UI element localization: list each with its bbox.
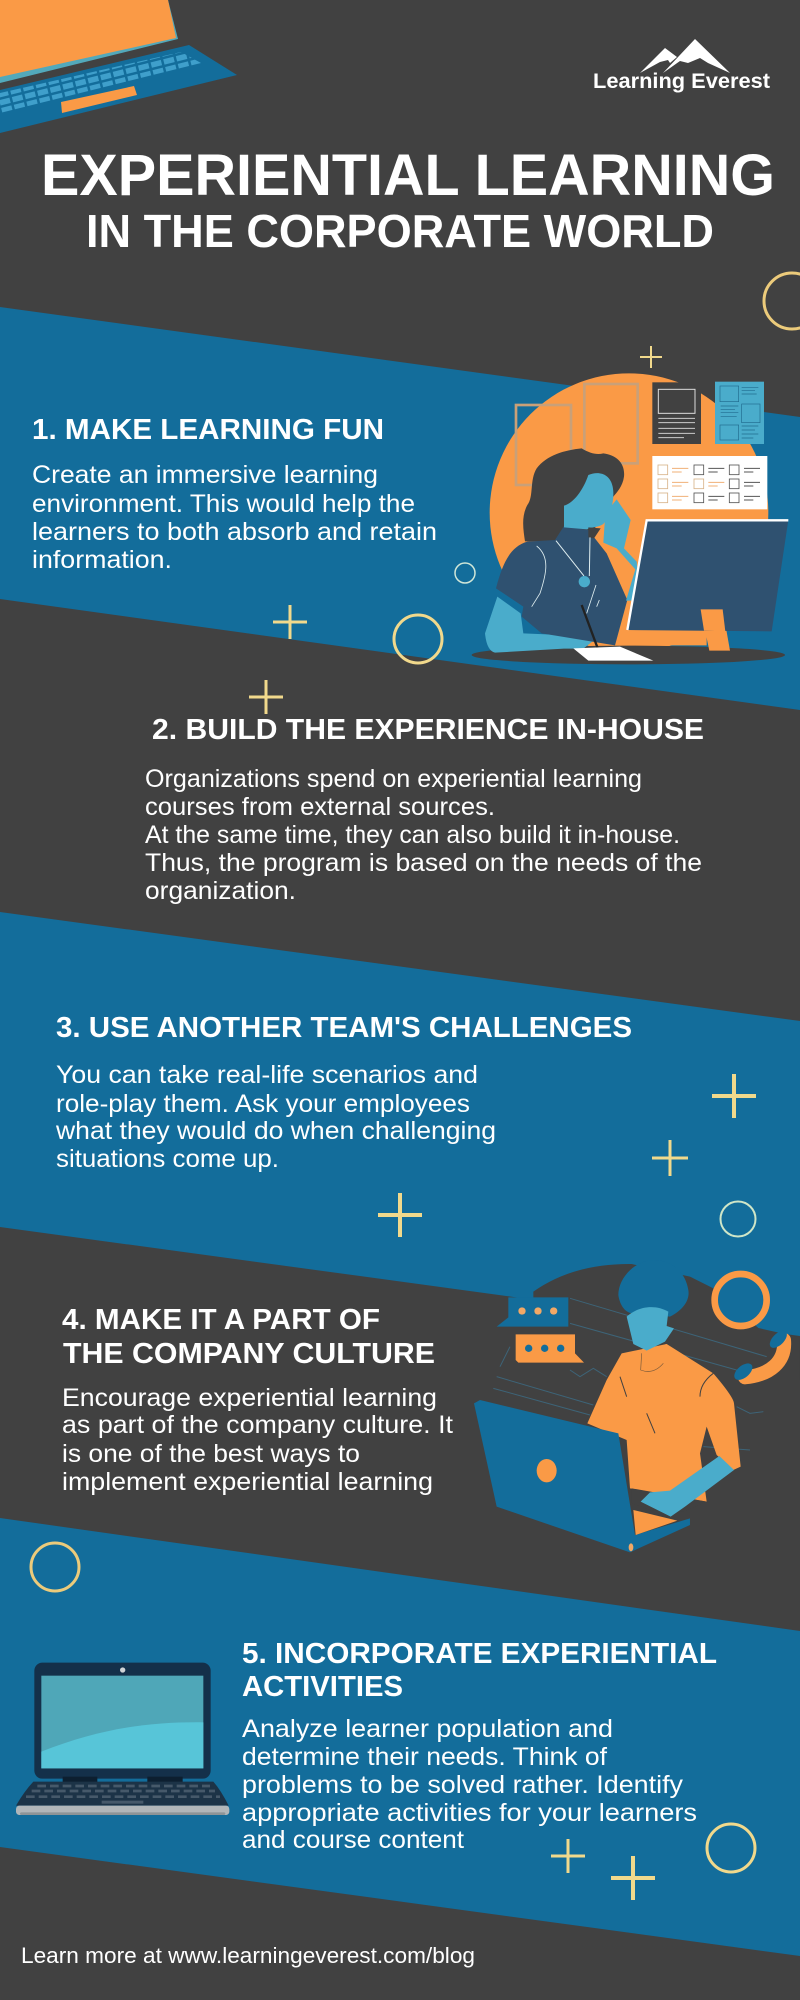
monitor bbox=[627, 520, 788, 651]
heading 4 bbox=[62, 1304, 435, 1370]
title: EXPERIENTIAL LEARNING bbox=[41, 143, 775, 208]
body text 1: Create an immersive learning bbox=[32, 461, 378, 489]
illustration: person with laptop bbox=[474, 1260, 800, 1552]
body text 2: organization. bbox=[145, 877, 296, 905]
laptop blue bbox=[474, 1400, 690, 1552]
body text 1: learners to both absorb and retain bbox=[32, 518, 437, 546]
icon: silver laptop bbox=[16, 1663, 229, 1815]
heading 3: 3. USE ANOTHER TEAM'S CHALLENGES bbox=[56, 1012, 632, 1044]
checklist card bbox=[652, 456, 767, 509]
body text 2: Thus, the program is based on the needs of the bbox=[145, 849, 702, 877]
body text 2: At the same time, they can also build it in-house. bbox=[145, 821, 680, 849]
phone handset bbox=[731, 1328, 790, 1383]
plus and ring accents section 3 bbox=[378, 1074, 756, 1237]
body text 3: situations come up. bbox=[56, 1145, 279, 1173]
body text 5: Analyze learner population and bbox=[242, 1715, 613, 1743]
body text 2: Organizations spend on experiential learning bbox=[145, 765, 642, 793]
body text 5: and course content bbox=[242, 1826, 464, 1854]
heading 2: 2. BUILD THE EXPERIENCE IN-HOUSE bbox=[152, 714, 704, 746]
body text 5: problems to be solved rather. Identify bbox=[242, 1771, 684, 1799]
body text 4 bbox=[62, 1384, 453, 1496]
icon: laptop top-left corner bbox=[0, 0, 237, 133]
illustration: woman at computer on phone bbox=[472, 373, 788, 664]
title: IN THE CORPORATE WORLD bbox=[86, 205, 714, 257]
footer link text: Learn more at www.learningeverest.com/blog bbox=[21, 1943, 475, 1968]
logo: Learning Everest bbox=[593, 39, 770, 93]
body text 3: what they would do when challenging bbox=[55, 1117, 496, 1145]
heading 5 bbox=[242, 1638, 717, 1703]
heading 4: THE COMPANY CULTURE bbox=[63, 1338, 435, 1370]
plus and ring accents section 5 bbox=[551, 1824, 755, 1900]
plus accent section 2 bbox=[249, 680, 283, 714]
heading 4: 4. MAKE IT A PART OF bbox=[62, 1304, 380, 1336]
ring orange bbox=[715, 1274, 767, 1326]
body text 3 bbox=[55, 1061, 496, 1173]
heading 5: ACTIVITIES bbox=[242, 1671, 403, 1703]
logo: Learning Everest: Learning Everest bbox=[593, 70, 770, 93]
body text 3: You can take real-life scenarios and bbox=[56, 1061, 478, 1089]
panel: section 1 make learning fun bbox=[0, 307, 800, 710]
figure: person bbox=[587, 1260, 741, 1517]
heading 1: 1. MAKE LEARNING FUN bbox=[32, 414, 384, 446]
body text 5: appropriate activities for your learners bbox=[242, 1799, 697, 1827]
body text 1: information. bbox=[32, 546, 172, 574]
body text 1: environment. This would help the bbox=[32, 490, 415, 518]
title bbox=[41, 143, 775, 257]
body text 1 bbox=[32, 461, 437, 574]
panel: section 3 another team's challenges bbox=[0, 912, 800, 1336]
heading 5: 5. INCORPORATE EXPERIENTIAL bbox=[242, 1638, 717, 1670]
body text 4: as part of the company culture. It bbox=[62, 1411, 453, 1439]
decorative ring top right bbox=[764, 273, 800, 329]
document: blue page bbox=[715, 382, 764, 444]
body text 4: is one of the best ways to bbox=[62, 1440, 360, 1468]
chat bubble orange bbox=[516, 1334, 584, 1363]
body text 4: Encourage experiential learning bbox=[62, 1384, 437, 1412]
document: dark page bbox=[652, 382, 701, 444]
panel: section 2 build in-house bbox=[145, 680, 704, 905]
decorative ring left bbox=[31, 1543, 79, 1591]
panel: section 4 company culture bbox=[62, 1260, 800, 1552]
panel: section 5 experiential activities bbox=[0, 1518, 800, 1956]
desk bbox=[472, 646, 785, 664]
plus and ring accents section 1 bbox=[273, 346, 662, 663]
body text 2: courses from external sources. bbox=[145, 793, 495, 821]
body text 5: determine their needs. Think of bbox=[242, 1743, 607, 1771]
body text 3: role-play them. Ask your employees bbox=[56, 1090, 470, 1118]
paper on desk bbox=[573, 647, 653, 661]
figure: woman bbox=[485, 448, 640, 653]
body text 4: implement experiential learning bbox=[62, 1468, 433, 1496]
body text 5 bbox=[242, 1715, 697, 1854]
chat bubble blue bbox=[497, 1297, 568, 1327]
body text 2 bbox=[145, 765, 702, 905]
